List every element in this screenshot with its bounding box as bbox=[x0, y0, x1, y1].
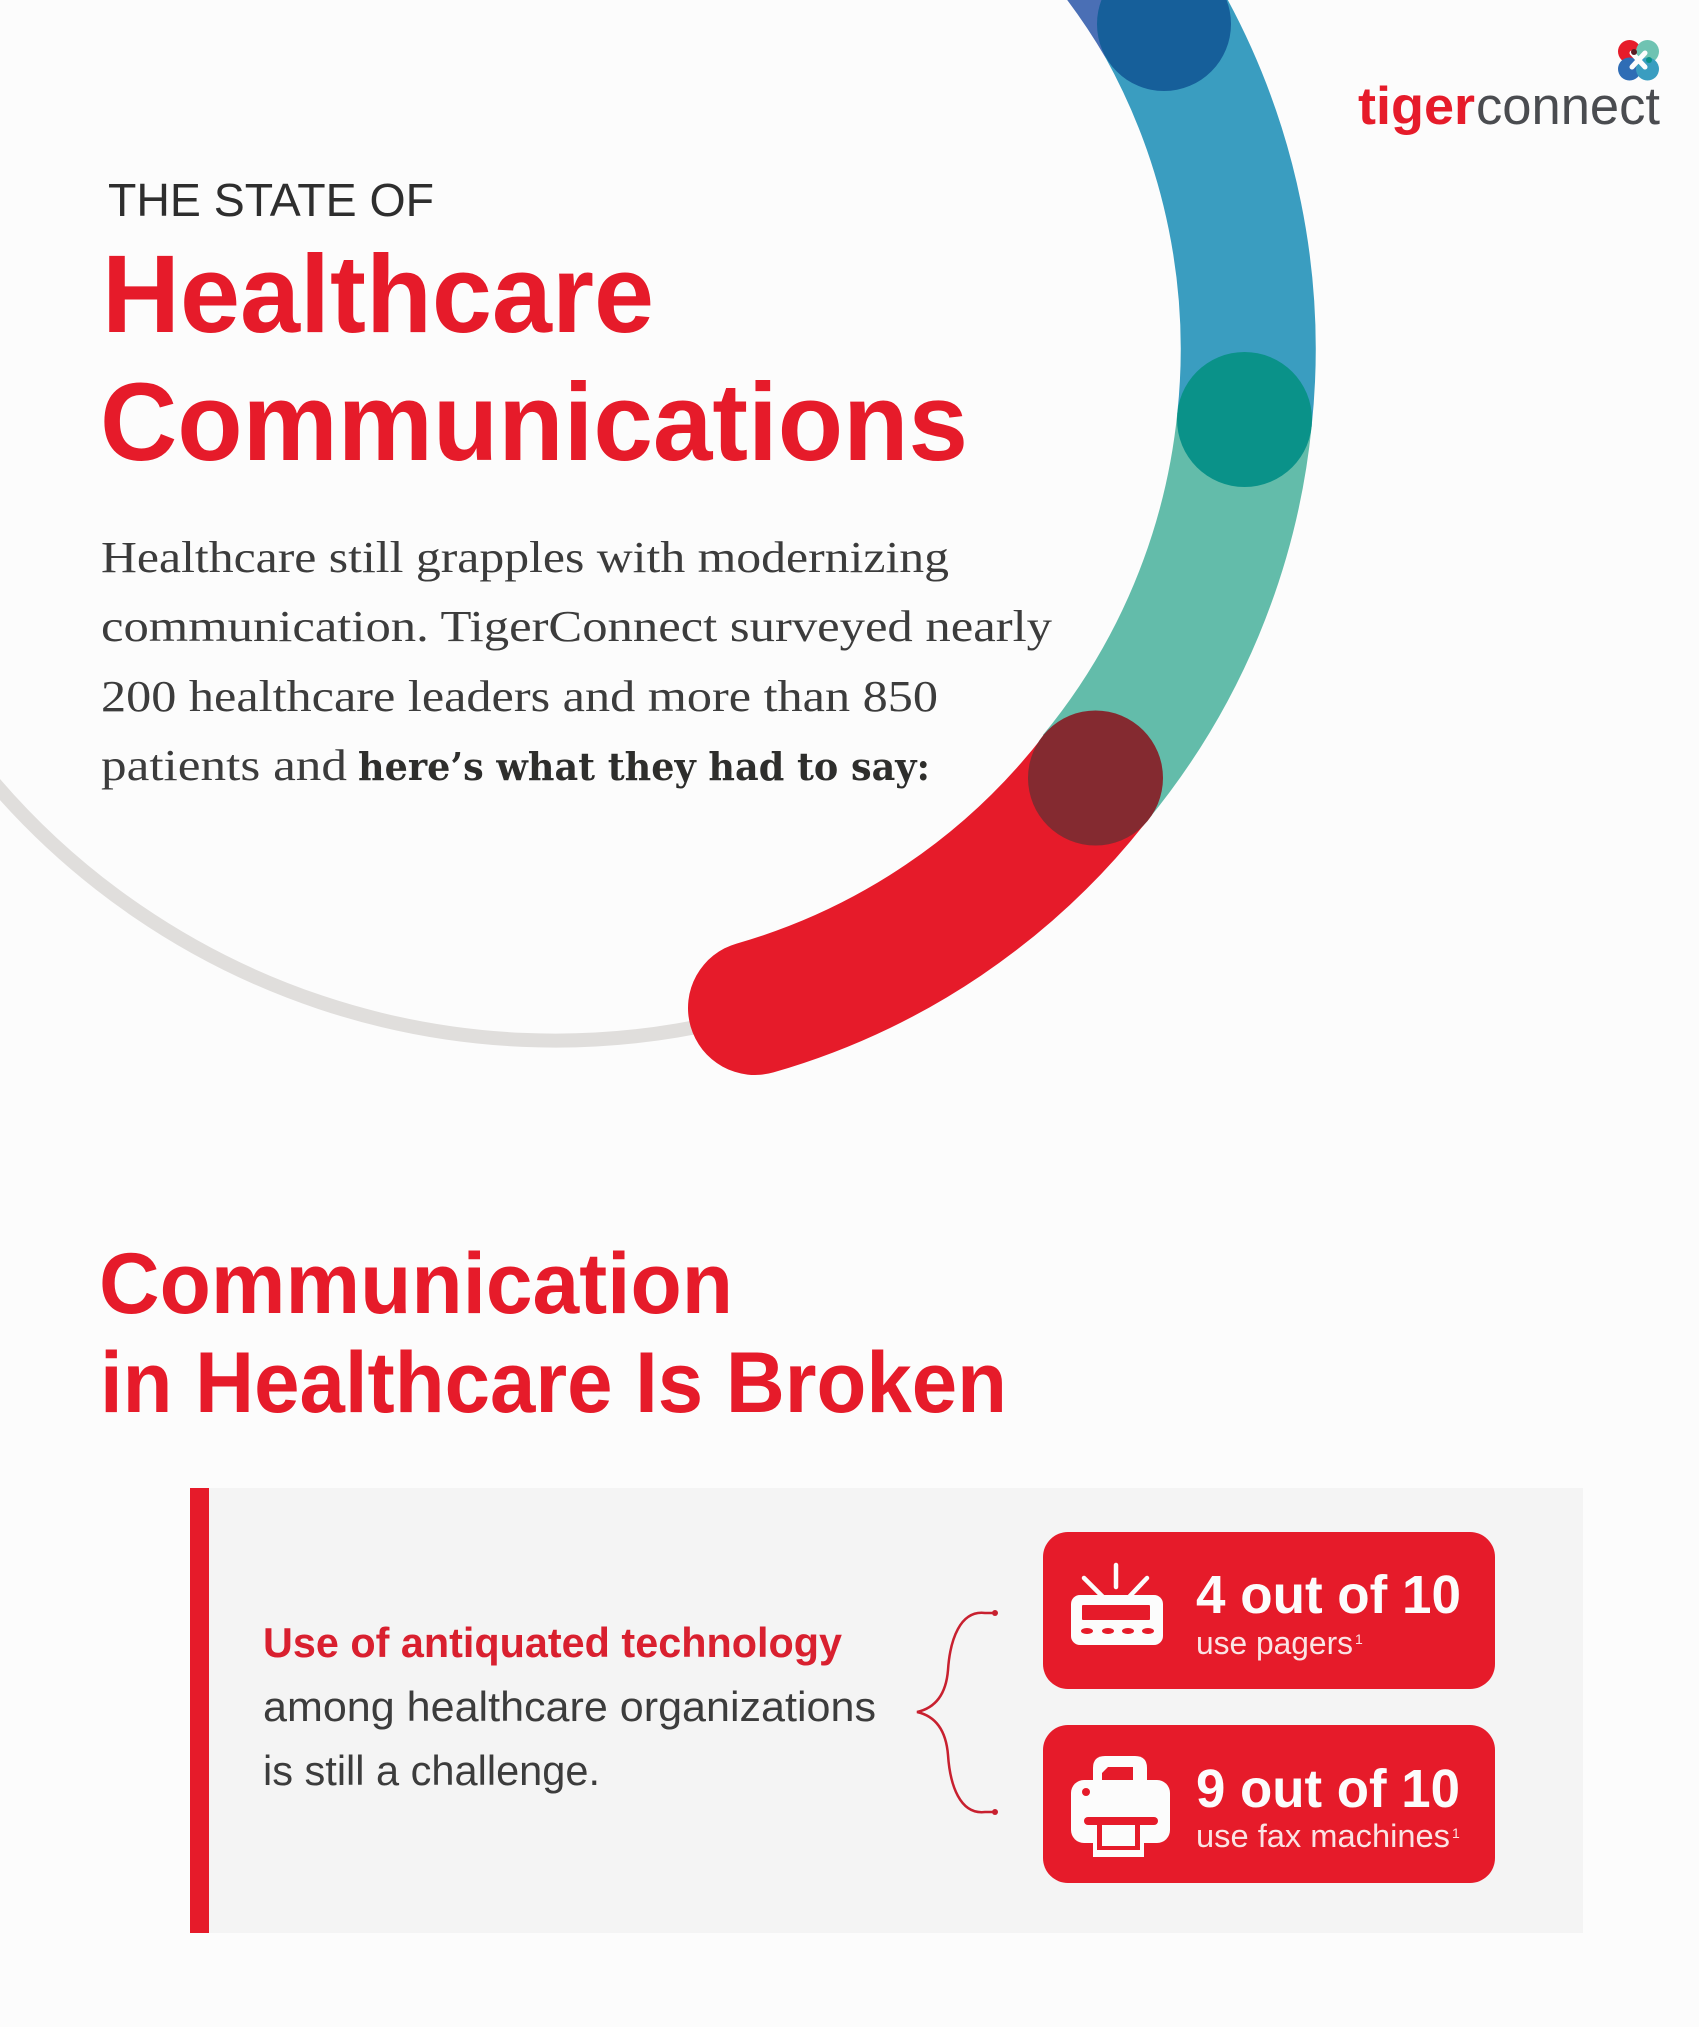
logo wordmark: tiger bbox=[1358, 77, 1475, 136]
icon: pager bbox=[1071, 1565, 1163, 1645]
intro paragraph: 200 healthcare leaders and more than 850 bbox=[101, 672, 938, 721]
section heading: in Healthcare Is Broken bbox=[100, 1335, 1007, 1431]
dark blue node bbox=[1097, 0, 1231, 91]
main title bbox=[100, 233, 968, 484]
eyebrow heading: THE STATE OF bbox=[108, 174, 434, 226]
curly brace bbox=[917, 1610, 998, 1815]
stat card: fax machines bbox=[1043, 1725, 1495, 1883]
indigo ribbon segment bbox=[1106, 0, 1164, 24]
section heading: Communication bbox=[99, 1236, 733, 1332]
panel statement: among healthcare organizations bbox=[263, 1683, 876, 1730]
red ribbon segment bbox=[755, 778, 1096, 1008]
intro paragraph: communication. TigerConnect surveyed nearly bbox=[101, 602, 1052, 651]
panel statement bbox=[263, 1619, 876, 1794]
stat card: pagers bbox=[1043, 1532, 1495, 1689]
logo wordmark: connect bbox=[1476, 77, 1660, 136]
intro paragraph: patients and bbox=[101, 741, 347, 790]
panel statement: Use of antiquated technology bbox=[263, 1619, 843, 1666]
pagers figure: 4 out of 10 bbox=[1196, 1565, 1461, 1625]
panel: antiquated technology bbox=[190, 1488, 1583, 1933]
ring graphic bbox=[0, 0, 1312, 1041]
blue ribbon segment bbox=[1164, 24, 1248, 420]
green ribbon segment bbox=[1095, 420, 1244, 778]
main title: Communications bbox=[100, 361, 968, 484]
fax label: use fax machines bbox=[1196, 1818, 1450, 1854]
intro paragraph bbox=[101, 533, 1052, 790]
intro paragraph: Healthcare still grapples with modernizing bbox=[101, 533, 949, 582]
teal node bbox=[1177, 352, 1312, 487]
intro paragraph: here’s what they had to say: bbox=[358, 744, 930, 789]
icon: fax machine bbox=[1071, 1756, 1170, 1857]
fax footnote mark: 1 bbox=[1452, 1825, 1460, 1841]
pagers footnote mark: 1 bbox=[1355, 1631, 1363, 1647]
main title: Healthcare bbox=[102, 233, 654, 356]
thin grey ring bbox=[0, 778, 720, 1041]
logo emblem bbox=[1618, 40, 1659, 80]
logo: TigerConnect bbox=[1358, 40, 1660, 136]
dark red node bbox=[1028, 710, 1163, 846]
section heading bbox=[99, 1236, 1007, 1431]
pagers label: use pagers bbox=[1196, 1625, 1353, 1661]
panel red accent bar bbox=[190, 1488, 209, 1933]
panel background bbox=[190, 1488, 1583, 1933]
panel statement: is still a challenge. bbox=[263, 1747, 600, 1794]
fax figure: 9 out of 10 bbox=[1196, 1759, 1460, 1819]
